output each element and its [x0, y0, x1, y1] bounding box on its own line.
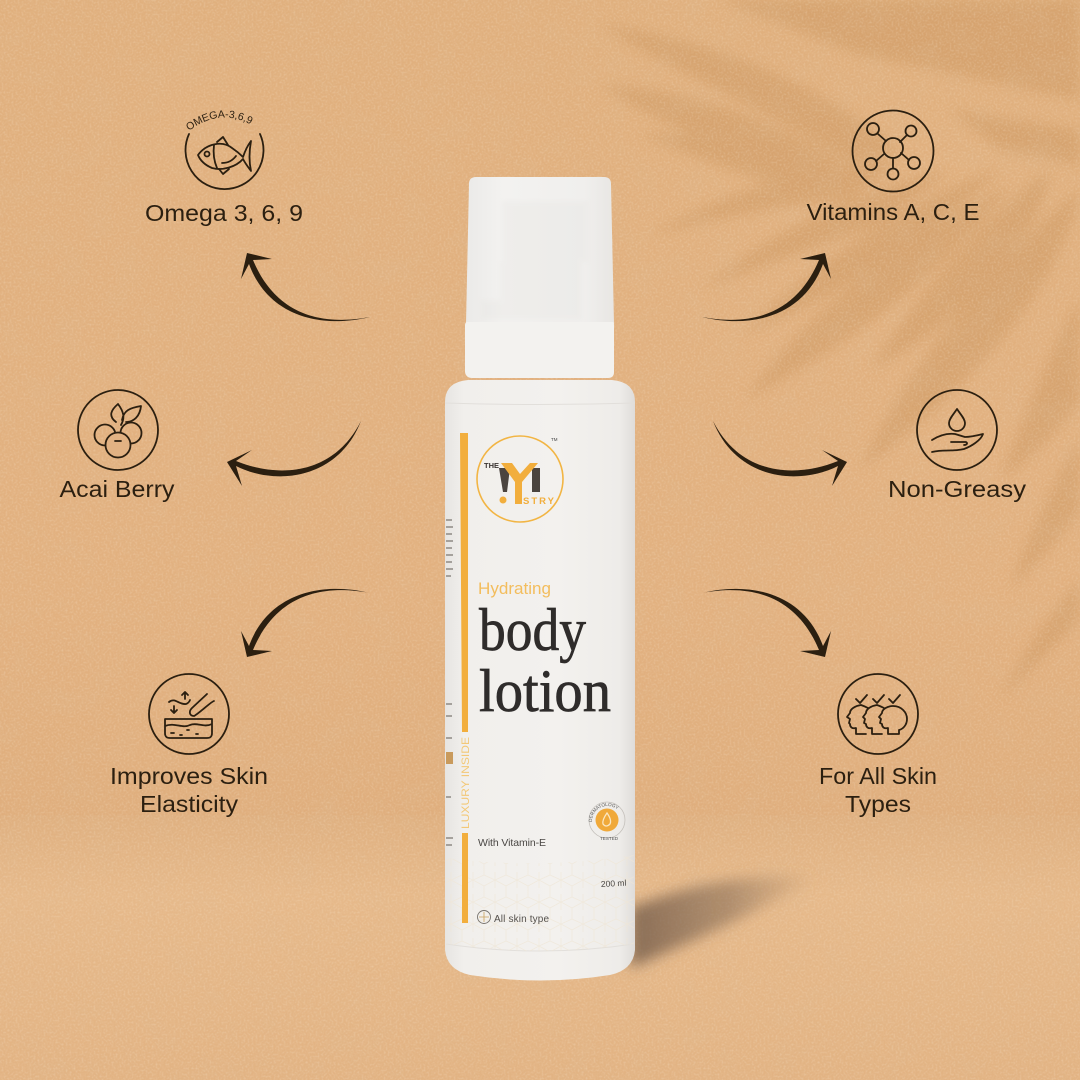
arrow middle left: [227, 421, 361, 486]
label: [819, 763, 937, 817]
label: Vitamins A, C, E: [806, 199, 980, 225]
label: Non-Greasy: [888, 476, 1027, 502]
icon: heads: [838, 674, 918, 754]
arrow middle right: [713, 421, 847, 486]
arrow top right: [702, 253, 831, 321]
lotion: lotion: [479, 658, 611, 724]
item: vitamins: [806, 110, 980, 225]
item: omega: [145, 110, 303, 226]
badge: TESTED: [600, 836, 619, 841]
label pattern: [446, 855, 634, 951]
logo: [477, 436, 563, 522]
orange stripe: [460, 433, 468, 923]
bottle: [445, 177, 635, 980]
arrow top left: [241, 253, 370, 321]
icon: skin: [149, 674, 229, 754]
item: non-greasy: [888, 390, 1027, 502]
floor: [0, 815, 1080, 1080]
body: body: [479, 597, 586, 663]
logo: TM: [551, 437, 558, 442]
all skin type: All skin type: [494, 914, 549, 925]
item: all skin types: [819, 674, 937, 817]
label: For All Skin: [819, 763, 937, 789]
logo: STRY: [523, 496, 555, 507]
bottle body: [445, 380, 635, 980]
item: acai: [60, 390, 175, 502]
logo: THE: [484, 461, 499, 470]
label: Improves Skin: [110, 763, 268, 789]
cap inner window: [480, 201, 588, 320]
item: elasticity: [110, 674, 268, 817]
icon: hand and drop: [917, 390, 997, 470]
all skin type: [478, 910, 549, 925]
arrow bottom left: [241, 589, 370, 657]
hydrating: Hydrating: [478, 579, 551, 598]
badge: [588, 802, 626, 841]
volume: 200 ml: [601, 878, 627, 889]
label: [110, 763, 268, 817]
label: Omega 3, 6, 9: [145, 200, 303, 226]
icon: fish: OMEGA-3,6,9: [186, 110, 252, 130]
icon: fish: [184, 110, 264, 190]
side ingredients text: [446, 520, 453, 845]
label: Types: [845, 791, 911, 817]
with vitamin e: With Vitamin-E: [478, 837, 546, 849]
label: Acai Berry: [60, 476, 175, 502]
luxury inside: LUXURY INSIDE: [460, 737, 472, 829]
label: Elasticity: [140, 791, 239, 817]
arrow bottom right: [702, 589, 831, 657]
icon: molecule: [852, 110, 934, 192]
collar: [465, 322, 614, 378]
palm leaf shadow: [600, 0, 1080, 700]
bottle shadow: [630, 876, 815, 968]
icon: berries: [78, 390, 158, 470]
badge: DERMATOLOGY: [588, 802, 619, 822]
pump cap: [466, 177, 614, 324]
